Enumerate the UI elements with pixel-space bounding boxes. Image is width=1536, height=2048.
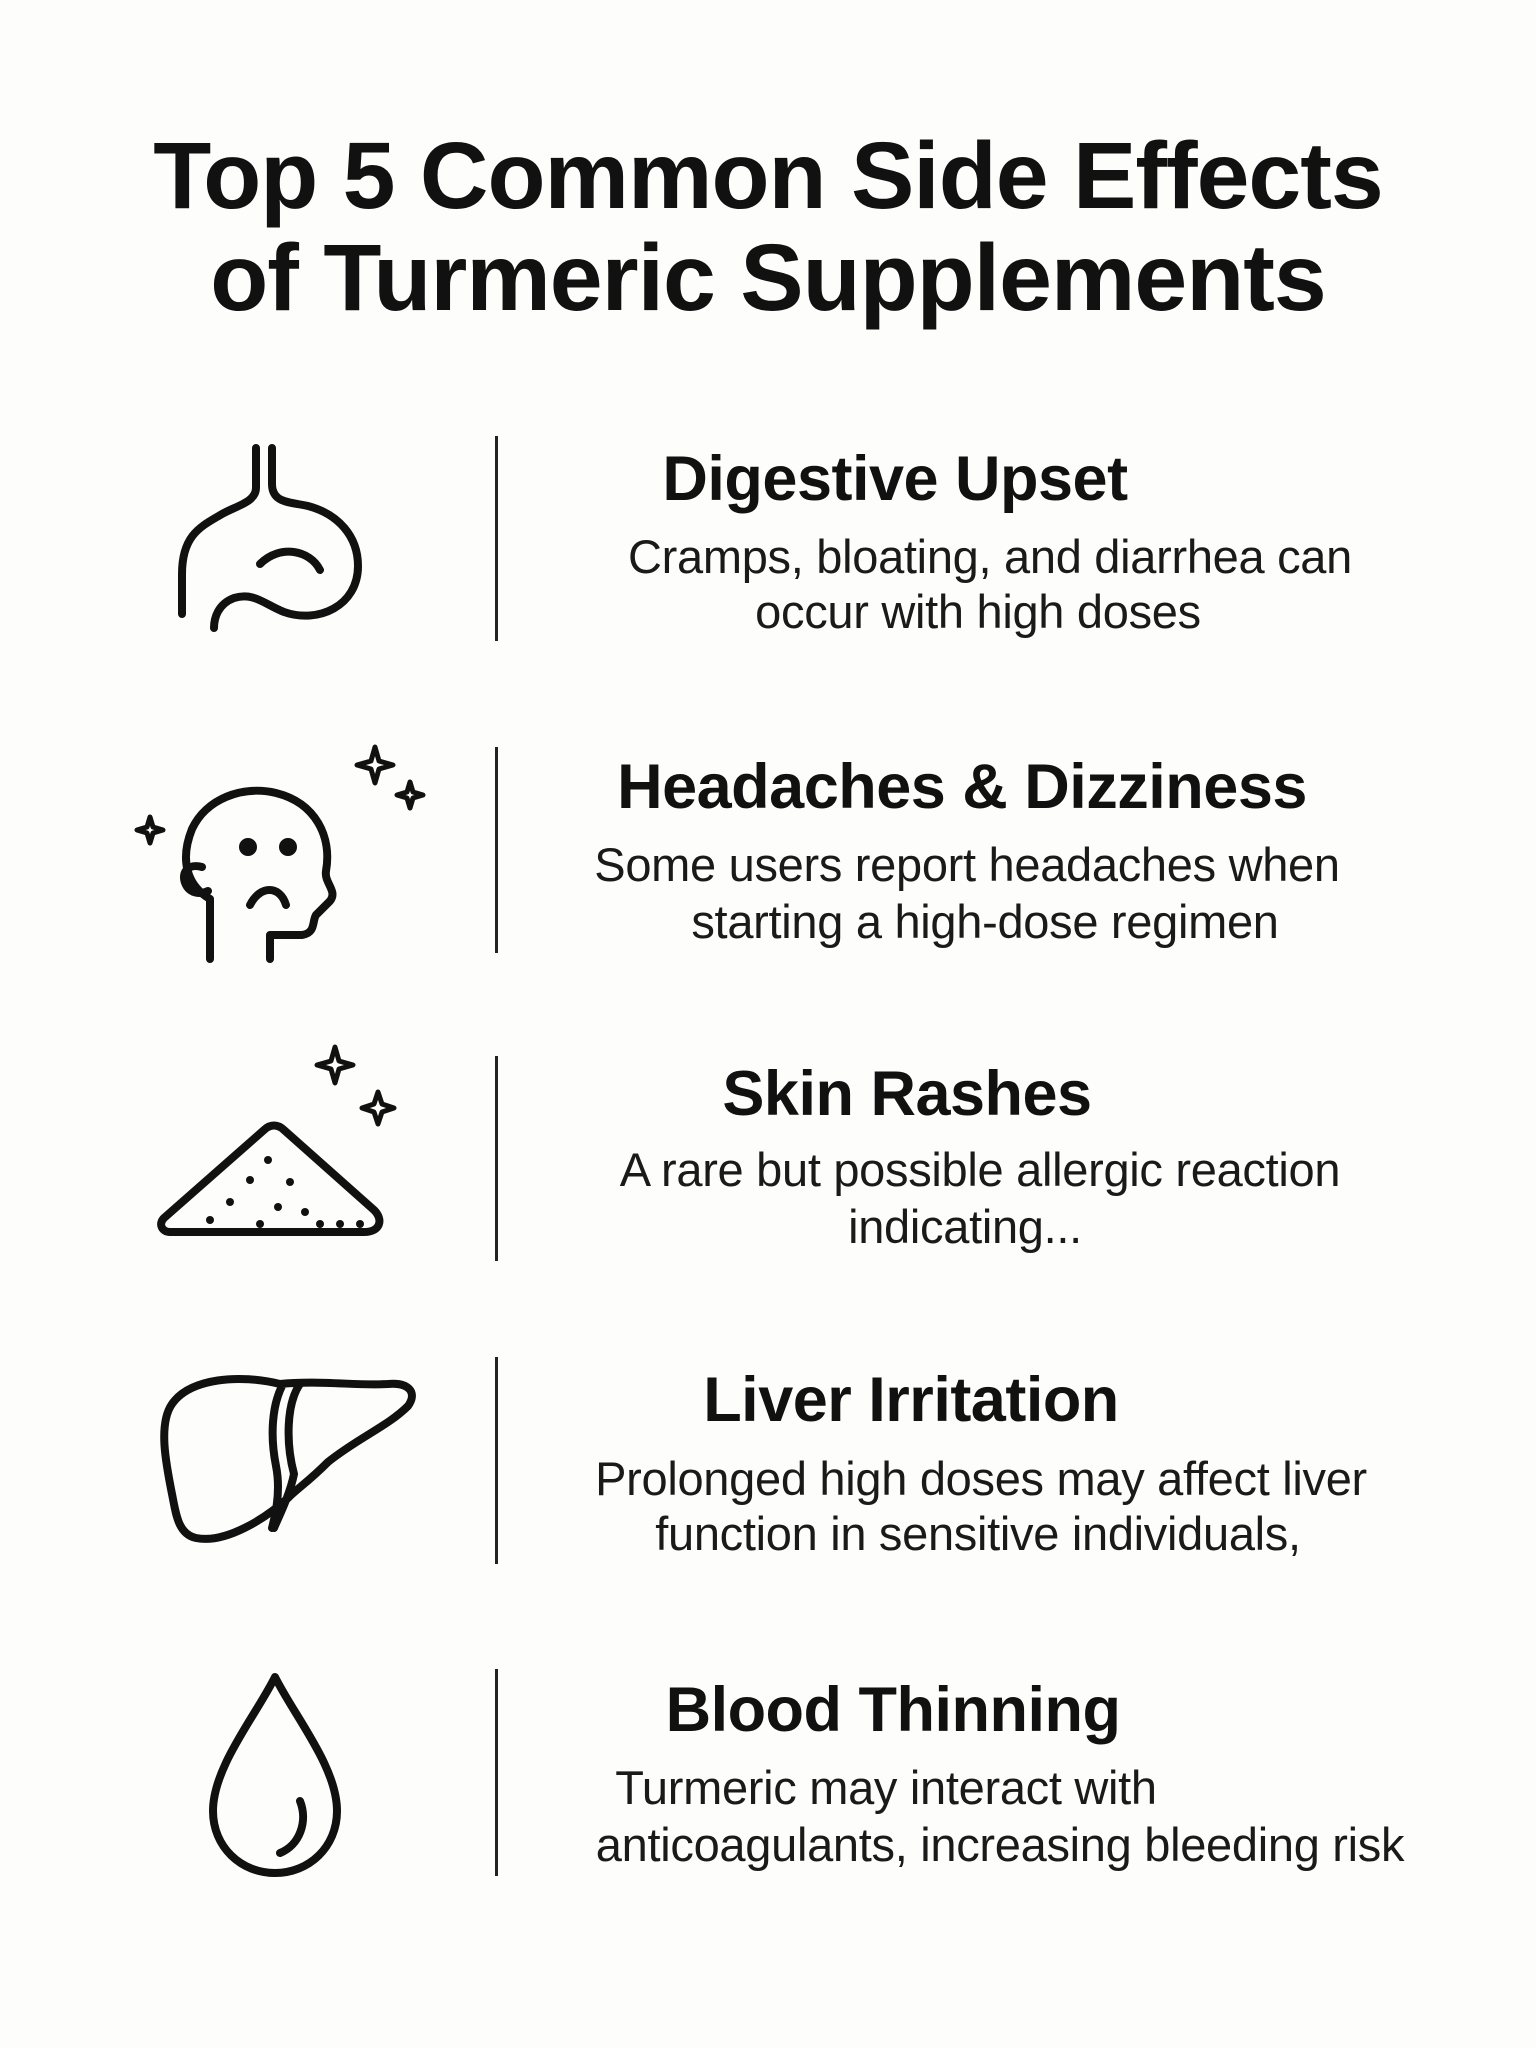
row: blood thinning — [209, 1669, 1404, 1877]
row: skin rashes — [157, 1044, 1340, 1261]
row: liver irritation: function in sensitive individuals, — [655, 1507, 1301, 1560]
title: of Turmeric Supplements — [210, 225, 1326, 331]
description: Some users report headaches when — [594, 838, 1340, 891]
heading: Liver Irritation — [703, 1365, 1119, 1435]
icon: drop — [209, 1673, 341, 1877]
heading: Headaches & Dizziness — [617, 752, 1307, 822]
description: Prolonged high doses may affect liver — [595, 1452, 1367, 1505]
row: headaches: starting a high-dose regimen — [691, 895, 1279, 948]
description: Cramps, bloating, and diarrhea can — [628, 530, 1352, 583]
row: headaches — [134, 744, 1340, 963]
row: skin rashes: indicating... — [848, 1200, 1082, 1253]
row: blood thinning: anticoagulants, increasing bleeding risk — [596, 1818, 1404, 1871]
icon: head with stars — [134, 744, 426, 963]
icon: powder pile — [157, 1044, 396, 1236]
divider — [495, 1056, 498, 1261]
description: A rare but possible allergic reaction — [620, 1143, 1340, 1196]
row: liver irritation — [160, 1357, 1367, 1564]
heading: Digestive Upset — [662, 444, 1128, 514]
row: digestive upset: occur with high doses — [755, 585, 1201, 638]
divider — [495, 1669, 498, 1876]
title — [153, 123, 1383, 331]
icon: stomach — [178, 444, 362, 632]
icon: liver — [160, 1375, 416, 1543]
description: Turmeric may interact with — [615, 1761, 1157, 1814]
divider — [495, 747, 498, 953]
divider — [495, 1357, 498, 1564]
heading: Blood Thinning — [666, 1675, 1120, 1745]
divider — [495, 436, 498, 641]
row: digestive upset — [178, 436, 1352, 641]
heading: Skin Rashes — [722, 1059, 1092, 1129]
title: Top 5 Common Side Effects — [153, 123, 1383, 229]
